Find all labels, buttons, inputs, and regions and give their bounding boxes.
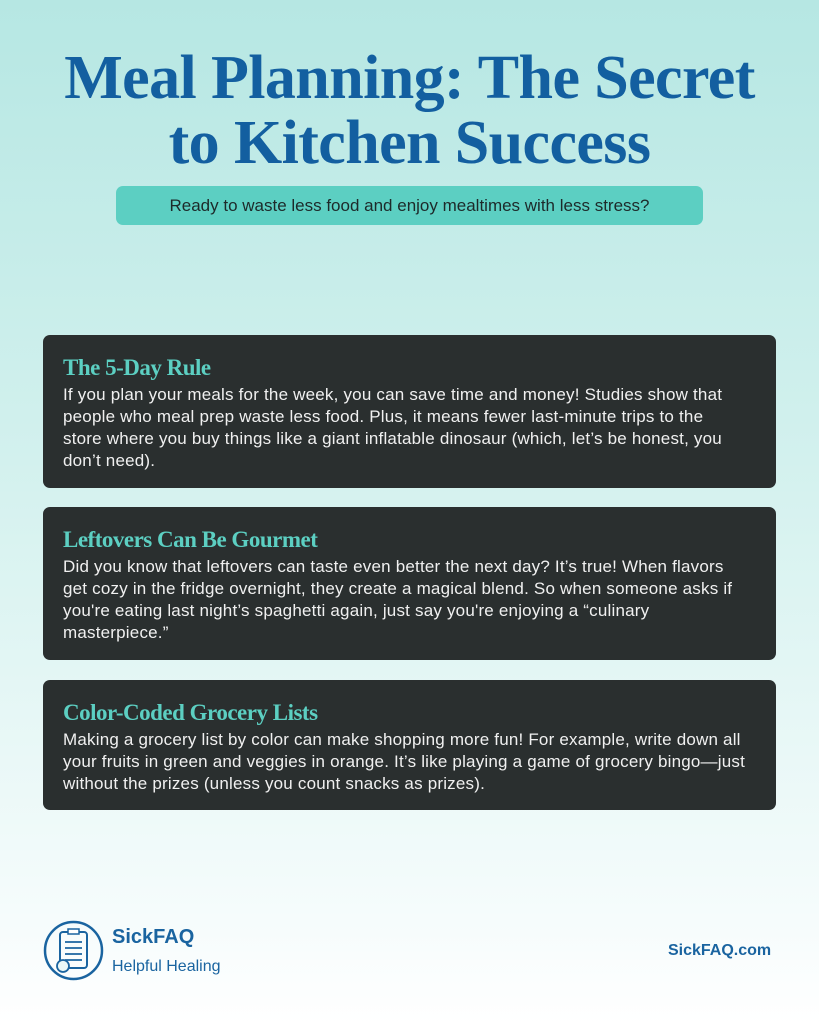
website: SickFAQ.com [668, 942, 771, 959]
card: leftovers [43, 507, 776, 660]
body text [63, 730, 745, 793]
body text [63, 385, 722, 470]
body text: masterpiece.” [63, 623, 169, 642]
title [64, 44, 756, 177]
body text: store where you buy things like a giant inflatable dinosaur (which, let’s be honest, you [63, 429, 722, 448]
heading: The 5-Day Rule [63, 355, 211, 380]
title: Meal Planning: The Secret [64, 44, 755, 112]
card: grocery lists [43, 680, 776, 810]
subtitle pill: Ready to waste less food and enjoy mealtimes with less stress? [169, 196, 650, 215]
title: to Kitchen Success [169, 109, 650, 177]
body text: Did you know that leftovers can taste even better the next day? It’s true! When flavors [63, 557, 724, 576]
body text: people who meal prep waste less food. Plus, it means fewer last-minute trips to the [63, 407, 703, 426]
card: 5-day rule [43, 335, 776, 488]
body text: without the prizes (unless you count snacks as prizes). [63, 774, 485, 793]
body text: If you plan your meals for the week, you can save time and money! Studies show that [63, 385, 722, 404]
body text: don’t need). [63, 451, 155, 470]
body text [63, 557, 732, 642]
heading: Leftovers Can Be Gourmet [63, 527, 317, 552]
subtitle pill [116, 186, 703, 225]
heading: Color-Coded Grocery Lists [63, 700, 318, 725]
body text: your fruits in green and veggies in orange. It’s like playing a game of grocery bingo—just [63, 752, 745, 771]
body text: get cozy in the fridge overnight, they create a magical blend. So when someone asks if [63, 579, 732, 598]
logo icon [44, 920, 104, 980]
body text: Making a grocery list by color can make shopping more fun! For example, write down all [63, 730, 741, 749]
brand name: SickFAQ [112, 926, 194, 948]
body text: you're eating last night’s spaghetti again, just say you're enjoying a “culinary [63, 601, 649, 620]
tagline: Helpful Healing [112, 958, 221, 975]
